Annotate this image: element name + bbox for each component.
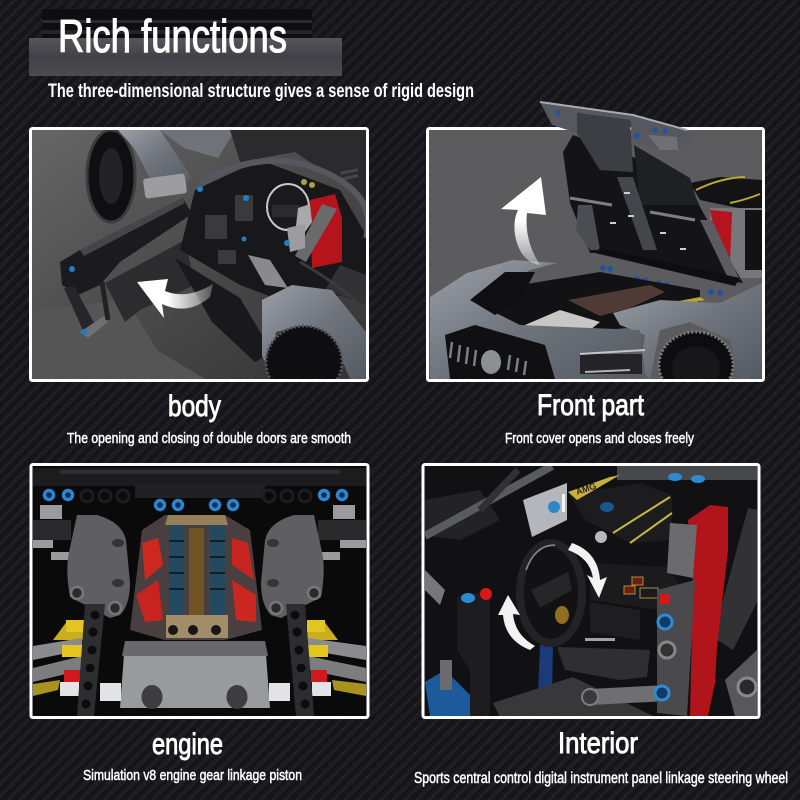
title banner [29,9,342,76]
steering wheel [520,543,582,643]
panel: body photo [30,128,368,398]
panel: engine photo [31,464,368,718]
heading: body: body [168,390,221,423]
white rotation arrows [498,543,607,650]
headlight [580,350,645,374]
heading: engine: engine [152,728,223,761]
blue connector pins [44,490,346,510]
beams [77,604,314,716]
panel: front part photo [428,102,764,398]
blue vertical strut [538,645,553,688]
caption: body: The opening and closing of double doors are smooth [67,430,351,447]
photo: open door on car body [32,130,368,398]
engine block [130,515,262,640]
instrument block [523,483,567,537]
white rotation arrow [137,279,213,318]
suspension left [33,680,60,696]
pillar [457,590,490,717]
subtitle: The three-dimensional structure gives a sense of rigid design [48,81,474,102]
photo: cockpit and steering wheel [425,466,758,717]
right dark panel [718,508,757,650]
lower console [557,647,650,680]
AMG badge: AMG [575,481,598,497]
caption: front part: Front cover opens and closes freely [505,430,694,447]
spoiler above frame [540,102,693,172]
white lift arrow [501,177,546,265]
grey seat bracket [667,523,697,578]
photo: front cover open [429,130,762,379]
suspension right [332,680,366,696]
red seat [688,505,728,716]
left intake [67,515,130,618]
photo: V8 engine [33,466,366,716]
lower block [120,641,270,708]
caption: engine: Simulation v8 engine gear linkage piston [83,767,302,784]
title: Rich functions [58,10,287,62]
panel: interior photo [423,464,759,718]
console cylinder [590,602,640,640]
door bar [60,173,192,338]
blue lower suspension [425,670,470,716]
heading: interior: Interior [558,727,638,760]
heading: front part: Front part [537,389,645,422]
right intake [261,515,324,618]
